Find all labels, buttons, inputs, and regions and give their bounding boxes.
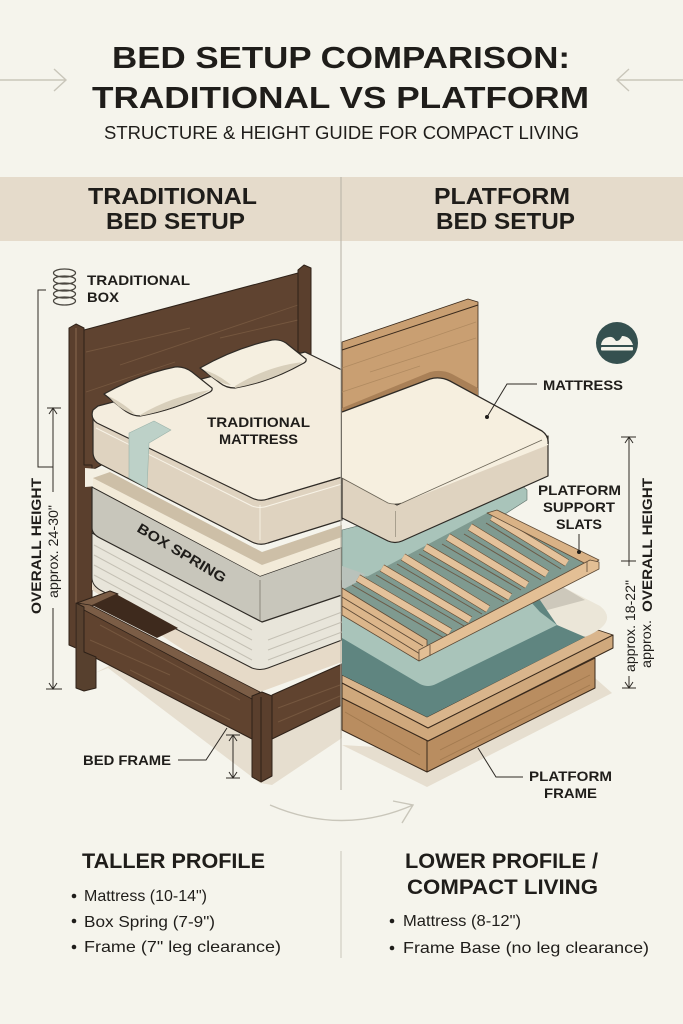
- heading: traditional: [88, 183, 257, 234]
- label: traditional mattress: TRADITIONAL: [207, 414, 310, 430]
- icon: mattress badge: [596, 322, 638, 364]
- light teal: [342, 590, 557, 686]
- heading: taller profile: TALLER PROFILE: [82, 850, 265, 873]
- label: traditional mattress: [207, 414, 310, 447]
- label: traditional box: [87, 272, 190, 305]
- dimension: platform overall height: approx. 18-22": [623, 580, 638, 672]
- list: traditional: Box Spring (7-9"): [84, 914, 215, 931]
- floor shadow: [95, 640, 342, 785]
- mattress top: [92, 352, 342, 500]
- strap: [129, 421, 171, 488]
- list: traditional: Mattress (10-14"): [84, 888, 207, 905]
- label: mattress: MATTRESS: [543, 377, 623, 393]
- heading: traditional: TRADITIONAL: [88, 183, 257, 209]
- heading: lower profile: LOWER PROFILE /: [405, 850, 598, 873]
- sheet shadow: [520, 587, 585, 612]
- label: bed frame: [83, 728, 227, 768]
- title: BED SETUP COMPARISON:: [112, 40, 570, 75]
- heading: platform: BED SETUP: [436, 208, 575, 234]
- dimension: leg clearance: [226, 735, 240, 778]
- list: traditional: Frame (7" leg clearance): [84, 939, 281, 956]
- floor shadow: [342, 678, 612, 787]
- label: traditional mattress: MATTRESS: [219, 431, 298, 447]
- label: platform support slats: PLATFORM: [538, 482, 621, 498]
- list: platform: Frame Base (no leg clearance): [403, 940, 649, 957]
- mattress side: [93, 418, 342, 544]
- label: mattress: [485, 377, 623, 419]
- icon: spring: [54, 269, 76, 305]
- dimension: traditional overall height: OVERALL HEIGHT: [28, 478, 44, 614]
- dimension: traditional overall height: approx. 24-30": [46, 505, 61, 598]
- box spring lower quilt: [92, 533, 342, 670]
- panel: lower profile: [390, 850, 649, 957]
- bed base floor: [92, 570, 342, 695]
- heading: traditional: BED SETUP: [106, 208, 245, 234]
- box spring: [92, 472, 342, 622]
- label: platform frame: FRAME: [544, 785, 597, 801]
- frame: [76, 591, 342, 782]
- pad shadow: [342, 566, 365, 592]
- teal base: [342, 600, 585, 717]
- white sheet: [520, 587, 607, 637]
- list: platform: Mattress (8-12"): [403, 913, 521, 930]
- label: platform frame: [478, 748, 612, 801]
- base frame: [342, 630, 613, 772]
- header band: [0, 177, 683, 241]
- subtitle: STRUCTURE & HEIGHT GUIDE FOR COMPACT LIVING: [104, 123, 579, 143]
- divider: [340, 851, 342, 958]
- dimension: platform overall height: approx.: [639, 620, 654, 668]
- label: platform frame: PLATFORM: [529, 768, 612, 784]
- list: traditional: [72, 888, 281, 956]
- slats: [342, 510, 599, 661]
- label: box spring: BOX SPRING: [134, 520, 229, 586]
- heading: lower profile: [405, 850, 598, 899]
- illustration: traditional bed: [69, 265, 342, 785]
- dimension: platform overall height: OVERALL HEIGHT: [639, 478, 655, 612]
- divider: [340, 177, 342, 790]
- mattress piping: [96, 428, 342, 508]
- panel: taller profile: [72, 850, 281, 956]
- heading: lower profile: COMPACT LIVING: [407, 876, 598, 899]
- mattress: [342, 378, 548, 542]
- illustration: platform bed: [342, 299, 613, 787]
- heading: platform: PLATFORM: [434, 183, 570, 209]
- label: platform support slats: [538, 482, 621, 554]
- arrow: curved: [270, 801, 413, 823]
- teal pad below mattress: [342, 484, 527, 580]
- pillow left: [104, 367, 212, 416]
- heading: platform: [434, 183, 575, 234]
- list: platform: [390, 913, 649, 957]
- dimension: traditional overall height: [28, 290, 62, 689]
- headboard: [69, 265, 311, 648]
- arrow: top right: [617, 69, 683, 91]
- label: platform support slats: SLATS: [556, 516, 602, 532]
- arrow: top left: [0, 69, 66, 91]
- title: [92, 40, 589, 115]
- label: traditional box: TRADITIONAL: [87, 272, 190, 288]
- label: traditional box: BOX: [87, 289, 120, 305]
- dimension: platform overall height: [621, 437, 655, 688]
- title: TRADITIONAL VS PLATFORM: [92, 80, 589, 115]
- pillow right: [200, 340, 306, 388]
- headboard: [342, 299, 478, 415]
- label: bed frame: BED FRAME: [83, 753, 171, 768]
- label: platform support slats: SUPPORT: [543, 499, 615, 515]
